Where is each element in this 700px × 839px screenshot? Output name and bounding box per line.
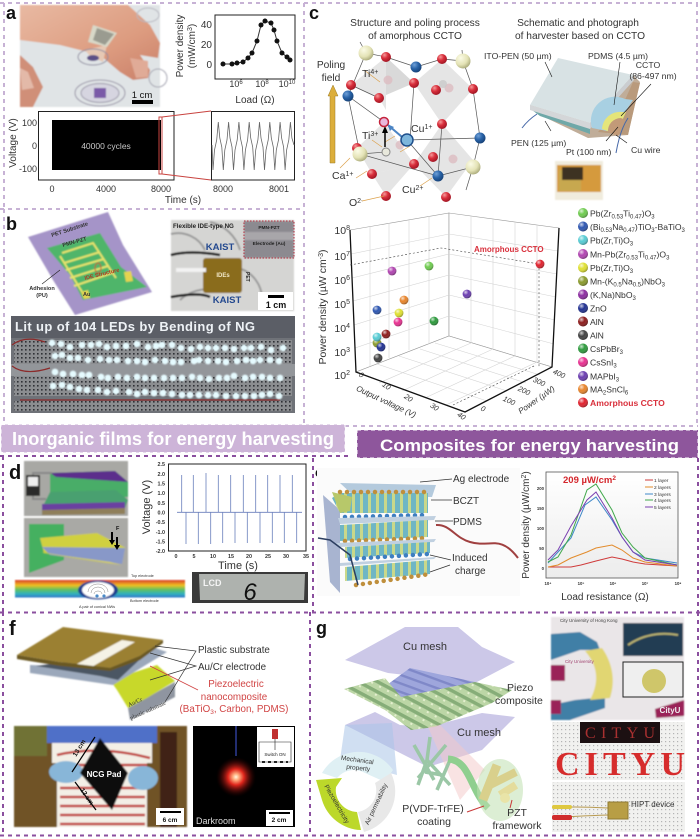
diagram: crystal structure: Ti	[362, 130, 370, 142]
photo: flexible IDE-type NG: 1 cm	[266, 300, 286, 310]
chart: power density, voltage and power 3D comparison: 300	[531, 375, 547, 389]
chart: power density vs load resistance: 209 µW/cm	[563, 475, 612, 486]
illustration: fibre framework magnification	[402, 737, 542, 832]
photo: flexible IDE-type NG: PET	[244, 272, 250, 282]
photo: LCD: LCD	[203, 578, 222, 588]
chart: voltage over time	[141, 462, 309, 572]
schematic: layered composite	[317, 468, 520, 596]
chart: power density vs load: 0	[206, 60, 212, 71]
photo: NCG pad held by person: 6 cm	[163, 817, 178, 824]
chart: power density vs load: 3	[187, 27, 194, 31]
chart: voltage over 40000 cycles: 100	[22, 118, 37, 128]
legend: materials: 0.5	[633, 282, 642, 288]
chart: zoomed voltage waveform: 8001	[269, 184, 289, 194]
chart: zoomed voltage waveform: 8000	[213, 184, 233, 194]
chart: power density, voltage and power 3D comparison: 200	[516, 384, 532, 398]
legend: materials: SnCl	[606, 384, 625, 394]
diagram: crystal structure: O	[349, 197, 357, 209]
legend: materials: )O	[642, 208, 652, 218]
chart: power density, voltage and power 3D comparison: 10	[334, 370, 346, 382]
chart: power density vs load resistance: 2	[612, 475, 616, 482]
illustration: Cu mesh and piezo composite layers: composite	[495, 695, 543, 707]
legend: materials: Pb(Zr,Ti)O	[590, 236, 630, 246]
chart: power density vs load resistance: 10⁵	[578, 581, 584, 586]
heading: schematic and photograph: Schematic and photograph	[517, 18, 639, 29]
labels: schematic b	[29, 221, 120, 299]
chart: power density, voltage and power 3D comparison: 20	[402, 391, 415, 405]
banner: inorganic films	[1, 424, 345, 452]
diagram: property cycle: Air permeability	[364, 782, 390, 826]
chart: power density, voltage and power 3D comparison: 10	[334, 299, 346, 311]
chart: voltage over time: 15	[228, 554, 234, 560]
legend: materials: 3	[630, 269, 634, 275]
legend: materials: 0.53	[626, 256, 639, 262]
photo: LED glow in darkroom	[193, 726, 295, 827]
chart: voltage over time: 0.5	[158, 501, 165, 507]
chart: voltage over time: 0.0	[158, 510, 165, 516]
labels: f layers: (BaTiO	[180, 704, 210, 715]
labels: composite layers: BCZT	[453, 496, 479, 507]
photo: NCG pad held by person: NCG Pad	[87, 770, 121, 779]
legend: materials: Ti	[623, 208, 630, 218]
chart: power density vs load: )	[187, 24, 198, 27]
photo: LCD	[192, 572, 308, 606]
legend: materials: 0.47	[623, 228, 636, 234]
diagram: harvester layers: PDMS (4.5 µm)	[588, 51, 648, 61]
diagram: potential distribution of conical NWs: Bottom electrode	[130, 599, 159, 603]
chart: power density vs load resistance: 3 layers	[654, 492, 671, 498]
labels: f layers: nanocomposite	[201, 692, 268, 703]
heading: schematic and photograph	[515, 18, 645, 42]
chart: voltage over 40000 cycles: Time (s)	[165, 195, 201, 206]
panel: b, IDE nanogenerator and LEDs	[6, 212, 295, 413]
chart: power density vs load resistance: 4 layers	[654, 498, 671, 504]
legend: materials: (K,Na)NbO	[590, 290, 632, 300]
diagram: property cycle	[316, 752, 395, 832]
diagram: crystal structure: Cu	[402, 184, 415, 196]
photo: HIPT device on breadboard	[552, 782, 685, 832]
legend: materials: Pb(Zr,Ti)O	[590, 263, 630, 273]
diagram: property cycle: Mechanical	[340, 755, 375, 766]
photo: flexible IDE-type NG: Flexible IDE-type NG	[173, 223, 234, 230]
legend: materials: 6	[625, 390, 629, 396]
chart: power density vs load resistance: 150	[537, 506, 545, 511]
diagram: crystal structure: Ca	[332, 170, 345, 182]
diagram: harvester layers: ITO-PEN (50 µm)	[484, 51, 552, 61]
chart: power density vs load resistance: 5 layers	[654, 505, 671, 511]
chart: power density, voltage and power 3D comparison: 6	[346, 275, 350, 282]
chart: voltage over time: 25	[265, 554, 271, 560]
photo: LED glow in darkroom: Darkroom	[196, 816, 236, 826]
labels: f layers: Piezoelectric	[208, 679, 264, 690]
legend: materials: 3	[682, 228, 686, 234]
legend: materials: 3	[666, 256, 670, 262]
legend: materials: MAPbI	[590, 372, 616, 382]
photo: LEDs lit on breadboard: Lit up of 104 LEDs by Bending of NG	[15, 319, 255, 334]
diagram: harvester layers: Pt (100 nm)	[566, 147, 611, 157]
chart: voltage over 40000 cycles: 0	[32, 141, 37, 151]
panel: a, flexible harvester with load and cycling curves	[0, 3, 304, 424]
scale bar: 1 cm: 1 cm	[132, 90, 152, 101]
diagram: crystal structure	[332, 42, 486, 209]
legend: materials: 3	[632, 296, 636, 302]
arrows: force F: F	[116, 526, 120, 532]
photo: flexible device with CityU backdrop: CityU	[660, 706, 681, 715]
photo: HIPT device on breadboard: HIPT device	[631, 800, 675, 809]
chart: power density, voltage and power 3D comparison: 10	[334, 323, 346, 335]
legend: materials: )O	[657, 250, 666, 260]
legend: materials: CsPbBr	[590, 344, 620, 354]
chart: power density, voltage and power 3D comparison	[317, 213, 567, 423]
chart: power density, voltage and power 3D comparison: 10	[334, 275, 346, 287]
chart: power density, voltage and power 3D comparison: 5	[346, 299, 350, 306]
schematic: stacked nanocomposite device	[17, 627, 175, 720]
illustration: Cu mesh and piezo composite layers	[340, 627, 543, 800]
chart: voltage over time: Voltage (V)	[141, 480, 153, 534]
arrow: poling field: field	[322, 73, 341, 84]
labels: schematic b: PMN-PZT	[62, 236, 88, 249]
chart: power density vs load resistance	[521, 471, 681, 603]
chart: power density vs load resistance: 100	[537, 526, 545, 531]
heading: structure and poling: Structure and poling process	[350, 18, 480, 29]
legend: materials: AlN	[590, 317, 604, 327]
photo: NCG pad held by person: 13 cm	[78, 787, 95, 807]
chart: power density, voltage and power 3D comparison: 7	[346, 251, 350, 258]
labels: schematic b: Au	[83, 292, 91, 298]
legend: materials: ZnO	[590, 304, 607, 314]
illustration: Cu mesh and piezo composite layers: Piezo	[507, 682, 533, 694]
chart: power density vs load: Load (Ω)	[235, 95, 275, 106]
labels: composite layers: Ag electrode	[453, 474, 510, 485]
legend: materials: )NbO	[641, 276, 662, 286]
chart: voltage over time: Time (s)	[218, 560, 258, 572]
heading: structure and poling: of amorphous CCTO	[368, 31, 462, 42]
diagram: crystal structure: 3+	[370, 131, 378, 138]
chart: power density vs load resistance: 50	[539, 546, 545, 551]
photo: CITYU LED breadboards: CITYU	[555, 746, 685, 783]
chart: voltage over time: 1.5	[158, 482, 165, 488]
chart: power density vs load: 40	[201, 20, 212, 31]
chart: voltage over 40000 cycles: 40000 cycles	[81, 141, 131, 151]
illustration: fibre framework magnification: P(VDF-TrFE)	[402, 803, 464, 815]
chart: power density vs load resistance: 200	[537, 486, 545, 491]
panel: c, amorphous CCTO structure and power comparison	[304, 3, 698, 426]
chart: voltage over 40000 cycles: 8000	[151, 184, 171, 194]
panel: a, flexible harvester with load and cycling curves: a	[6, 3, 17, 23]
illustration: Cu mesh and piezo composite layers: Cu mesh	[403, 641, 447, 653]
chart: voltage over time: 35	[303, 554, 309, 560]
diagram: crystal structure: 2-	[357, 198, 364, 205]
diagram: crystal structure: 2+	[415, 185, 423, 192]
legend: materials: 3	[613, 364, 617, 370]
panel: f, nanocomposite generator	[0, 612, 700, 836]
chart: power density, voltage and power 3D comparison: 30	[428, 401, 441, 414]
chart: power density vs load resistance: 10⁷	[642, 581, 648, 586]
photo: CITYU LED breadboards	[552, 722, 685, 783]
photo: harvester device	[555, 161, 603, 200]
photo: NCG pad held by person	[14, 726, 187, 827]
chart: power density vs load: 6	[239, 80, 243, 86]
diagram: harvester layers: (86-497 nm)	[629, 71, 677, 81]
chart: voltage over 40000 cycles: -100	[19, 164, 37, 174]
legend: materials: 3	[651, 228, 655, 234]
labels: f layers	[127, 645, 288, 722]
legend: materials: Na	[622, 276, 633, 286]
panel: f, nanocomposite generator: f	[9, 618, 16, 640]
chart: voltage over time: 20	[246, 554, 252, 560]
chart: power density vs load	[175, 15, 296, 106]
diagram: potential distribution of conical NWs: A pair of conical NWs	[79, 605, 115, 609]
photo: finger with device	[20, 5, 167, 107]
chart: power density, voltage and power 3D comparison: 400	[551, 367, 567, 381]
photo: flexible IDE-type NG	[171, 220, 294, 311]
chart: power density, voltage and power 3D comparison: Output voltage (V)	[355, 384, 418, 420]
chart: power density vs load: 10	[289, 80, 296, 86]
legend: materials	[578, 208, 686, 408]
chart: power density vs load: Power density	[175, 15, 186, 77]
legend: materials: Amorphous CCTO	[590, 398, 665, 408]
labels: schematic b: PET Substrate	[51, 221, 89, 239]
chart: voltage over time: 0	[174, 554, 178, 560]
legend: materials: (Bi	[590, 222, 601, 232]
labels: composite layers: PDMS	[453, 517, 482, 528]
photo: flexible IDE-type NG: Electrode (Au)	[253, 241, 286, 247]
panel: d, conical nanowire generator: d	[9, 462, 21, 484]
photo: flexible IDE-type NG: KAIST	[206, 242, 234, 253]
labels: f layers: Au/Cr	[127, 697, 143, 709]
legend: materials: AlN	[590, 330, 604, 340]
labels: composite layers: charge	[455, 566, 486, 577]
chart: power density, voltage and power 3D comparison: 10	[334, 225, 346, 237]
labels: composite layers	[452, 474, 510, 577]
diagram: harvester layers: Cu wire	[631, 145, 661, 155]
chart: voltage over time: 2.5	[158, 462, 165, 468]
photo: LED glow in darkroom: 2 cm	[272, 817, 287, 824]
diagram: crystal structure: Cu	[411, 123, 424, 135]
photo: flexible IDE-type NG: PMN-PZT	[258, 225, 280, 231]
diagram: harvester layers	[484, 51, 677, 157]
chart: power density vs load resistance: 1 layer	[654, 478, 669, 484]
chart: power density vs load resistance: 10⁸	[675, 581, 681, 586]
heading: schematic and photograph: of harvester based on CCTO	[515, 31, 645, 42]
legend: materials: Mn-(K	[590, 276, 613, 286]
chart: voltage over time: 10	[210, 554, 216, 560]
chart: power density vs load resistance: Power density (µW/cm	[521, 479, 532, 579]
chart: power density vs load: 20	[201, 40, 212, 51]
photo: flexible IDE-type NG: KAIST	[213, 295, 241, 306]
chart: voltage over 40000 cycles: Voltage (V)	[8, 118, 19, 168]
legend: materials: 2	[603, 390, 607, 396]
chart: power density, voltage and power 3D comparison: -3	[318, 253, 325, 259]
chart: power density vs load resistance: Load resistance (Ω)	[561, 592, 649, 603]
photo: NCG pad held by person: 13 cm	[72, 739, 88, 758]
legend: materials: 0.53	[601, 228, 613, 234]
chart: power density vs load: (mW/cm	[187, 31, 198, 68]
labels: composite layers: Induced	[452, 553, 488, 564]
legend: materials: CsSnI	[590, 358, 613, 368]
legend: materials: 0.53	[611, 214, 624, 220]
legend: materials: )TiO	[635, 222, 652, 232]
legend: materials: 3	[620, 350, 624, 356]
photo: LCD: 6	[243, 579, 257, 606]
labels: schematic b: IDE Structure	[84, 267, 120, 282]
panel: b, IDE nanogenerator and LEDs: b	[6, 214, 17, 234]
chart: power density, voltage and power 3D comparison: 40	[455, 410, 468, 423]
panel: g, 3D composite harvester: g	[316, 618, 327, 638]
legend: materials: Pb(Zr	[590, 208, 611, 218]
legend: materials: 0.47	[630, 214, 642, 220]
diagram: crystal structure: 1+	[424, 124, 432, 131]
banner: composites: Composites for energy harvesting	[380, 436, 679, 455]
labels: f layers: Au/Cr electrode	[198, 662, 267, 673]
chart: power density vs load resistance: 2 layers	[654, 485, 671, 491]
legend: materials: 0.5	[613, 282, 622, 288]
legend: materials: 3	[662, 282, 666, 288]
diagram: crystal structure: 4+	[370, 69, 378, 76]
diagram: potential distribution of conical NWs	[15, 574, 185, 609]
chart: voltage over time: -2.0	[156, 549, 165, 555]
diagram: property cycle: property	[346, 764, 371, 773]
legend: materials: 3	[616, 378, 620, 384]
illustration: fibre framework magnification: PZT	[507, 807, 527, 819]
chart: voltage over time: 30	[283, 554, 289, 560]
chart: power density, voltage and power 3D comparison: 0	[479, 404, 488, 414]
schematic: device with ammeter	[24, 461, 128, 516]
photo: flexible device with CityU backdrop	[551, 617, 684, 720]
chart: power density, voltage and power 3D comparison: 8	[346, 225, 350, 232]
diagram: harvester layers: CCTO	[636, 60, 660, 70]
chart: voltage over 40000 cycles: 0	[49, 184, 55, 194]
legend: materials: MA	[590, 384, 603, 394]
chart: power density, voltage and power 3D comparison: 100	[501, 394, 517, 408]
chart: power density vs load: 10	[255, 79, 265, 89]
chart: power density vs load: 10	[229, 79, 239, 89]
chart: voltage over time: -1.0	[156, 530, 165, 536]
diagram: harvester layers: PEN (125 µm)	[511, 138, 566, 148]
photo: LEDs lit on breadboard	[11, 316, 295, 413]
photo: flexible device with CityU backdrop: City University	[565, 659, 595, 664]
chart: power density, voltage and power 3D comparison: 10	[380, 380, 393, 393]
arrow: poling field	[317, 60, 345, 163]
chart: voltage over time: -1.5	[156, 540, 165, 546]
chart: voltage over 40000 cycles	[8, 111, 211, 206]
illustration: fibre framework magnification: coating	[417, 816, 451, 828]
illustration: Cu mesh and piezo composite layers: Cu mesh	[457, 727, 501, 739]
chart: voltage over 40000 cycles: 4000	[96, 184, 116, 194]
legend: materials: -BaTiO	[655, 222, 682, 232]
chart: power density vs load: 10	[279, 79, 289, 89]
labels: f layers: , Carbon, PDMS)	[214, 704, 288, 715]
chart: voltage over time: 1.0	[158, 491, 165, 497]
illustration: fibre framework magnification: framework	[492, 820, 542, 832]
banner: inorganic films: Inorganic films for energy harvesting	[12, 429, 334, 449]
chart: power density vs load resistance: 0	[542, 566, 545, 571]
chart: power density, voltage and power 3D comparison: Amorphous CCTO	[474, 245, 544, 254]
chart: power density, voltage and power 3D comparison: 10	[334, 251, 346, 263]
panel: e, multilayer BCZT composite: e	[315, 464, 323, 480]
photo: flexible device with CityU backdrop: City University of Hong Kong	[560, 618, 618, 623]
LED rows	[49, 340, 286, 399]
panel: c, amorphous CCTO structure and power comparison: c	[309, 3, 319, 23]
data points	[373, 260, 544, 362]
legend: materials: 0.47	[645, 256, 657, 262]
chart: power density, voltage and power 3D comparison: Power (µW)	[517, 384, 557, 416]
chart: power density, voltage and power 3D comparison: 0	[357, 370, 366, 380]
chart: power density, voltage and power 3D comparison: 10	[334, 347, 346, 359]
photo: LED glow in darkroom: Switch ON	[264, 752, 286, 757]
chart: power density, voltage and power 3D comparison: 4	[346, 323, 350, 330]
legend: materials: Ti	[638, 250, 645, 260]
legend: materials: 3	[651, 214, 655, 220]
diagram: crystal structure: Ti	[362, 68, 370, 80]
schematic: IDE structure on PET	[28, 212, 152, 315]
diagram: potential distribution of conical NWs: Top electrode	[131, 574, 154, 578]
chart: power density, voltage and power 3D comparison: )	[317, 250, 329, 253]
legend: materials: Mn-Pb(Zr	[590, 250, 626, 260]
chart: power density vs load resistance: 2	[521, 475, 528, 479]
labels: f layers: 3	[210, 709, 214, 716]
chart: power density vs load resistance: )	[521, 471, 532, 475]
chart: power density, voltage and power 3D comparison: 3	[346, 347, 350, 354]
chart: voltage over time: 2.0	[158, 472, 165, 478]
panel: d, conical nanowire generator	[0, 456, 700, 612]
photo: CITYU LED breadboards: CITYU	[585, 725, 655, 742]
panel: e, multilayer BCZT composite	[315, 464, 681, 603]
chart: power density vs load: 8	[265, 80, 269, 86]
heading: structure and poling	[350, 18, 480, 42]
arrows: force F	[109, 526, 120, 550]
chart: zoomed voltage waveform	[212, 112, 294, 194]
photo: flexible IDE-type NG: IDEs	[216, 273, 230, 279]
labels: f layers: plastic substrate	[129, 701, 167, 722]
legend: materials: 3	[630, 242, 634, 248]
chart: power density, voltage and power 3D comparison: Power density (µW cm	[317, 259, 329, 364]
legend: materials: Na	[612, 222, 623, 232]
chart: power density vs load resistance: 10⁶	[610, 581, 616, 586]
panel: g, 3D composite harvester	[316, 617, 685, 832]
chart: voltage over time: 5	[192, 554, 196, 560]
banner: composites	[357, 430, 698, 458]
diagram: crystal structure: 1+	[345, 171, 353, 178]
labels: schematic b: (PU)	[36, 293, 48, 299]
chart: voltage over time: -0.5	[156, 520, 165, 526]
schematic: cantilever bending	[24, 518, 128, 577]
labels: f layers: Plastic substrate	[198, 645, 270, 656]
labels: schematic b: Adhesion	[29, 286, 55, 292]
diagram: property cycle: Piezoelectricity	[322, 784, 351, 825]
chart: power density, voltage and power 3D comparison: 2	[346, 370, 350, 377]
chart: power density vs load resistance: 10⁴	[545, 581, 551, 586]
arrow: poling field: Poling	[317, 60, 345, 71]
